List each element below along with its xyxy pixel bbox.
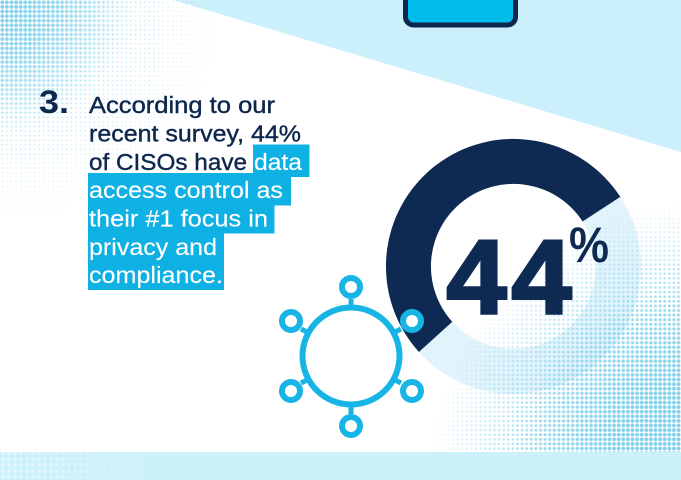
dark text lines: of CISOs have xyxy=(89,149,247,175)
percent sign: % xyxy=(569,217,609,273)
dark text lines: According to our xyxy=(89,92,275,118)
dark text lines: recent survey, 44% xyxy=(89,120,301,146)
hub circle xyxy=(302,308,400,404)
highlighted white text lines: data xyxy=(254,149,303,175)
dark text lines xyxy=(89,92,301,175)
number 3: 3. xyxy=(39,84,69,120)
highlighted white text lines xyxy=(89,149,303,288)
blue rounded box cropped at top xyxy=(406,0,516,25)
pale donut track xyxy=(419,197,641,394)
halftone dots: bottom right xyxy=(440,210,681,452)
highlighted white text lines: compliance. xyxy=(89,262,223,288)
highlighted white text lines: access control as xyxy=(89,177,283,203)
satellite nodes xyxy=(282,278,421,435)
donut value arc 44% xyxy=(386,139,620,352)
big number 44: 4 xyxy=(446,219,506,336)
bottom light blue strip xyxy=(0,452,681,480)
icon: network hub xyxy=(282,278,421,435)
highlighted white text lines: their #1 focus in xyxy=(89,206,268,232)
connector lines xyxy=(301,299,401,414)
text highlight background xyxy=(88,144,310,290)
survey text block xyxy=(88,92,310,290)
big number 44: 4 xyxy=(512,219,572,336)
big number 44 xyxy=(446,219,572,336)
highlighted white text lines: privacy and xyxy=(89,234,217,260)
halftone dots: top left xyxy=(0,0,210,210)
top light blue diagonal band xyxy=(173,0,681,152)
